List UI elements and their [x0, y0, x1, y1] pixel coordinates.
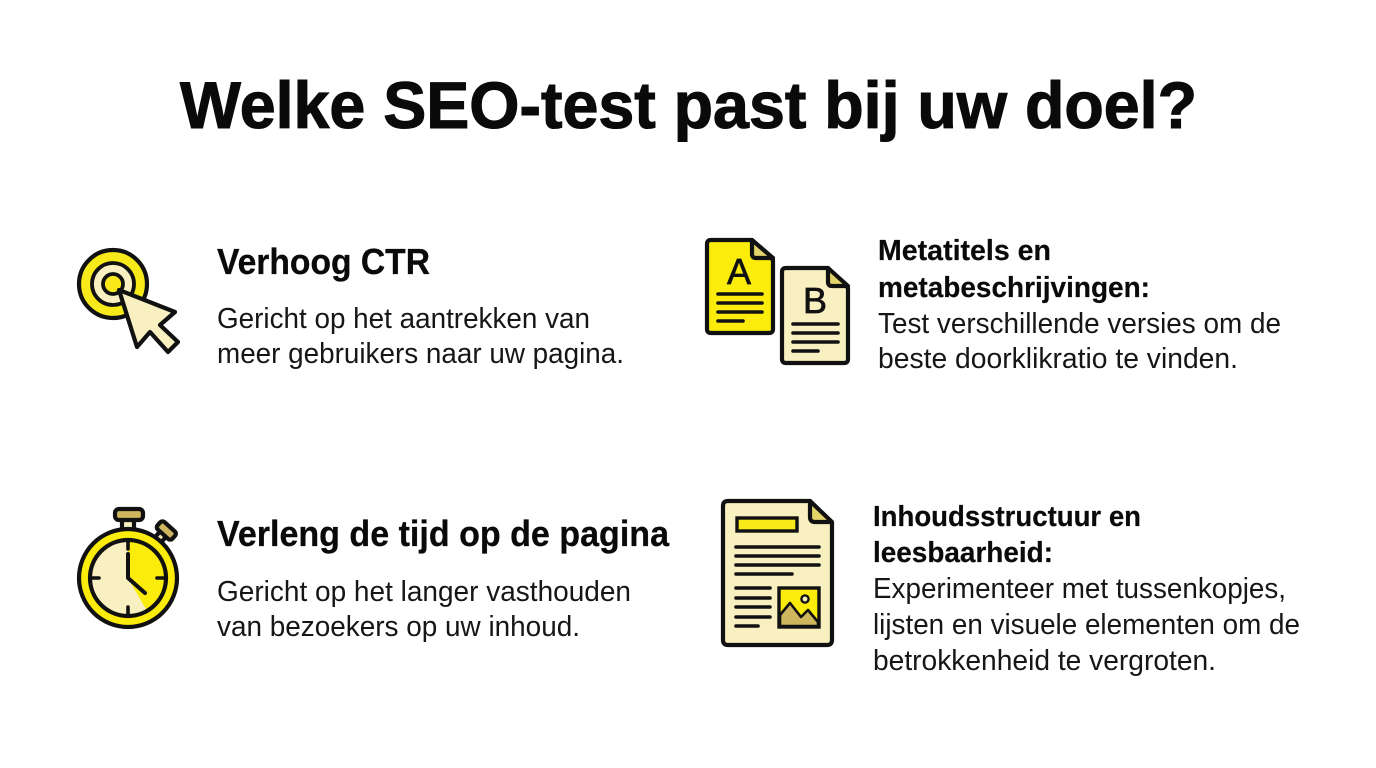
panel: Inhoudsstructuur en leesbaarheid — [723, 501, 1300, 677]
text: structure description — [873, 573, 1300, 677]
heading: Verhoog CTR: Verhoog CTR — [217, 241, 430, 282]
heading: Verleng de tijd op de pagina: Verleng de tijd op de pagina — [217, 513, 670, 554]
heading: Metatitels en metabeschrijvingen: metabeschrijvingen: — [878, 272, 1150, 304]
heading: Metatitels en metabeschrijvingen: Metatitels en — [878, 235, 1051, 267]
text: CTR description: meer gebruikers naar uw pagina. — [217, 338, 624, 370]
panel: Metatitels en metabeschrijvingen — [707, 235, 1281, 375]
icon: A/B documents: B — [803, 280, 827, 321]
text: structure description: betrokkenheid te vergroten. — [873, 645, 1216, 677]
text: meta description — [878, 308, 1281, 375]
heading: Inhoudsstructuur en leesbaarheid — [873, 501, 1141, 569]
text: time description: van bezoekers op uw inhoud. — [217, 611, 580, 643]
title: Welke SEO-test past bij uw doel? — [180, 68, 1197, 142]
panel: Verleng de tijd op de pagina — [79, 509, 670, 643]
icon: A/B documents — [707, 240, 848, 363]
text: time description: Gericht op het langer vasthouden — [217, 576, 631, 608]
text: time description — [217, 576, 631, 643]
icon: A/B documents: A — [727, 251, 751, 292]
panel: Verhoog CTR — [79, 241, 624, 370]
heading: Inhoudsstructuur en leesbaarheid: Inhoudsstructuur en — [873, 501, 1141, 533]
heading: Inhoudsstructuur en leesbaarheid: leesbaarheid: — [873, 537, 1053, 569]
icon: picture thumbnail — [779, 588, 819, 627]
text: structure description: lijsten en visuele elementen om de — [873, 609, 1300, 641]
icon: stopwatch — [79, 509, 177, 627]
text: meta description: Test verschillende versies om de — [878, 308, 1281, 340]
heading: Metatitels en metabeschrijvingen — [878, 235, 1150, 304]
text: CTR description: Gericht op het aantrekken van — [217, 303, 590, 335]
text: CTR description — [217, 303, 624, 370]
text: meta description: beste doorklikratio te vinden. — [878, 343, 1238, 375]
icon: target with cursor — [79, 250, 178, 352]
text: structure description: Experimenteer met tussenkopjes, — [873, 573, 1286, 605]
icon: article document — [723, 501, 832, 645]
